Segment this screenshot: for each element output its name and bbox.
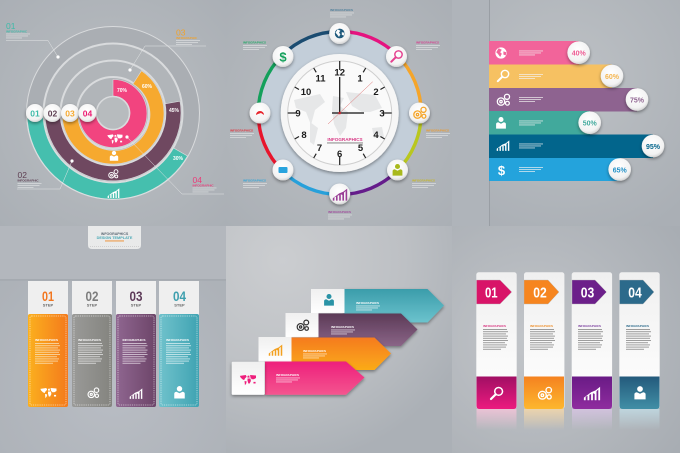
card 04: 04 <box>628 286 642 302</box>
step 01: 01 <box>42 288 54 304</box>
coloured ring segments <box>258 32 421 194</box>
step number buttons <box>26 104 96 122</box>
label 03 <box>176 28 200 45</box>
template badge <box>88 226 141 249</box>
label 03: 03 <box>176 28 186 38</box>
step number buttons: 02 <box>48 108 57 118</box>
label 01: INFOGRAPHIC <box>6 30 28 34</box>
step number buttons: 03 <box>65 108 75 118</box>
clock labels: INFOGRAPHICS <box>230 128 253 132</box>
clock numerals: 4 <box>373 130 379 141</box>
ribbon: 50% <box>489 111 590 134</box>
arc: 70% pink <box>79 80 147 148</box>
leader lines <box>6 40 224 194</box>
ring chart tracks <box>26 26 200 200</box>
purple arrow <box>286 313 418 346</box>
teal arrow: INFOGRAPHICS <box>356 301 379 305</box>
leader dots <box>56 55 132 163</box>
ribbon: 75% <box>489 88 637 112</box>
clock labels: INFOGRAPHICS <box>426 128 449 132</box>
step 02: STEP <box>87 302 98 308</box>
clock labels: INFOGRAPHICS <box>416 40 439 44</box>
step 01 <box>28 281 68 407</box>
card 03: INFOGRAPHICS <box>578 324 601 328</box>
ribbon: 65% <box>489 158 620 181</box>
template badge: INFOGRAPHICS <box>101 232 129 236</box>
clock labels <box>230 8 450 219</box>
percent badges <box>567 41 664 181</box>
card 01 <box>476 272 517 409</box>
step 04: 04 <box>173 288 186 304</box>
world map watermark <box>294 92 384 145</box>
clock labels: INFOGRAPHICS <box>243 40 266 44</box>
upper fold <box>0 226 226 280</box>
step 02: 02 <box>86 288 99 304</box>
clock numerals: 5 <box>358 143 364 154</box>
step 03: STEP <box>131 302 142 308</box>
step 01: STEP <box>43 302 54 308</box>
second hand <box>328 82 373 124</box>
step 03: INFOGRAPHICS <box>122 338 146 342</box>
ribbon text lines <box>519 50 543 172</box>
percent badges: 75% <box>630 98 645 104</box>
percentage labels: 70% <box>117 88 128 94</box>
label 04 <box>192 175 216 192</box>
pale blue disc <box>259 32 421 194</box>
ribbon: 95% <box>489 134 653 158</box>
clock numerals: 8 <box>301 130 307 141</box>
step 02: INFOGRAPHICS <box>78 338 101 342</box>
percentage labels: 60% <box>142 84 153 90</box>
arc: 45% purple <box>45 101 181 181</box>
step 03: 03 <box>130 288 143 304</box>
ribbon icons <box>495 47 510 178</box>
percentage labels <box>117 84 184 162</box>
clock labels: INFOGRAPHICS <box>328 210 351 214</box>
ring icons <box>107 134 122 198</box>
label 01: 01 <box>6 21 16 31</box>
orange arrow: INFOGRAPHICS <box>303 349 326 353</box>
panel: percentage ribbons <box>452 0 680 226</box>
clock numerals: 10 <box>301 87 311 98</box>
percentage labels: 30% <box>173 156 184 162</box>
arc: 30% teal <box>27 113 188 199</box>
percent badges: 95% <box>646 144 661 151</box>
pink arrow: INFOGRAPHICS <box>276 373 299 377</box>
percent badges: 60% <box>605 74 620 81</box>
clock labels: INFOGRAPHICS <box>412 178 435 182</box>
card 04: INFOGRAPHICS <box>626 324 649 328</box>
panel: clock ring <box>226 0 452 226</box>
label 02: INFOGRAPHIC <box>18 178 39 182</box>
template badge: DESIGN TEMPLATE <box>97 236 133 240</box>
label 04: 04 <box>192 175 202 185</box>
purple arrow: INFOGRAPHICS <box>331 325 354 329</box>
card 02: INFOGRAPHICS <box>530 324 553 328</box>
clock labels: INFOGRAPHICS <box>330 8 353 12</box>
clock labels: INFOGRAPHICS <box>243 178 266 182</box>
percent badges: 65% <box>613 168 627 174</box>
panel: concentric ring chart <box>0 0 226 226</box>
card 02 <box>524 272 564 409</box>
orange arrow <box>258 337 391 370</box>
pink arrow <box>232 362 364 395</box>
clock numerals: 3 <box>379 108 385 120</box>
step 04: STEP <box>174 302 185 308</box>
card 01: INFOGRAPHICS <box>483 324 506 328</box>
clock nodes <box>250 23 430 204</box>
label 03: INFOGRAPHIC <box>176 36 198 40</box>
card 03 <box>572 272 612 409</box>
card 04 <box>619 272 660 409</box>
clock numerals <box>295 68 385 160</box>
label 02: 02 <box>18 170 27 180</box>
percentage labels: 45% <box>169 108 180 114</box>
clock numerals: 1 <box>357 74 363 84</box>
label 01 <box>6 21 30 38</box>
clock numerals: 9 <box>295 108 301 120</box>
clock title: INFOGRAPHICS <box>327 137 363 142</box>
clock numerals: 2 <box>373 87 379 98</box>
card 03: 03 <box>581 286 594 302</box>
ribbon: 40% <box>489 41 579 64</box>
percent badges: 50% <box>583 120 597 128</box>
clock numerals: 6 <box>337 149 342 160</box>
clock ticks <box>288 61 392 165</box>
clock face <box>281 54 399 172</box>
step 04 <box>159 281 199 407</box>
clock numerals: 12 <box>334 68 345 78</box>
node icons: $ <box>279 50 287 64</box>
ribbon icons: $ <box>498 163 506 178</box>
panel: flag cards <box>452 226 680 453</box>
step 02 <box>72 281 112 407</box>
step 04: INFOGRAPHICS <box>166 338 189 342</box>
step number buttons: 04 <box>83 108 92 118</box>
clock numerals: 7 <box>317 143 322 154</box>
node icons <box>256 29 426 201</box>
step number buttons: 01 <box>30 108 40 118</box>
panel: stitched steps <box>0 226 226 453</box>
step 01: INFOGRAPHICS <box>35 338 58 342</box>
panel: stacked arrows <box>226 226 452 453</box>
card 02: 02 <box>533 286 547 302</box>
teal arrow <box>311 289 444 322</box>
step 03 <box>116 281 156 407</box>
clock numerals: 11 <box>315 74 326 84</box>
card 01: 01 <box>485 286 498 302</box>
card reflections <box>476 409 660 430</box>
hour and minute hands <box>332 77 364 113</box>
arc: 60% orange <box>62 71 164 164</box>
percent badges: 40% <box>572 50 586 58</box>
label 04: INFOGRAPHIC <box>192 184 214 188</box>
label 02 <box>18 170 42 188</box>
left fold <box>452 0 489 226</box>
centre disc <box>96 96 130 130</box>
ribbon: 60% <box>489 64 612 88</box>
